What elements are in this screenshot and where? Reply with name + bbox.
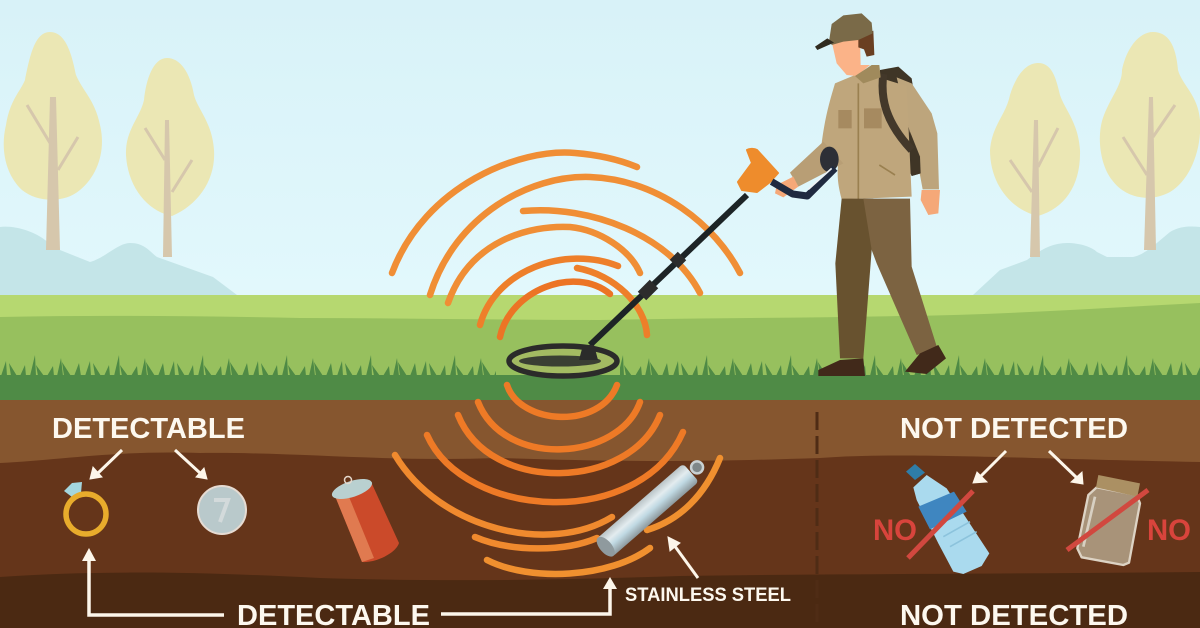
hair	[858, 31, 874, 57]
soil: middle layer	[0, 452, 1200, 628]
cap	[829, 13, 873, 45]
icon: red soda can	[330, 475, 399, 562]
backpack strap	[883, 74, 912, 150]
tree: second left	[126, 58, 214, 257]
signal waves below ground	[395, 385, 720, 574]
collar	[855, 65, 881, 83]
hands	[775, 177, 940, 215]
handle highlight	[808, 168, 832, 189]
tree: second right	[990, 63, 1080, 257]
cuff grip	[820, 147, 839, 172]
person with backpack	[772, 13, 946, 376]
signal waves above ground	[392, 153, 740, 337]
arrows from top NOT DETECTED label	[973, 451, 1083, 484]
left arm	[790, 142, 843, 187]
arrow to stainless steel tube	[668, 537, 698, 578]
search coil	[509, 345, 617, 376]
label: NO right: NO	[1147, 514, 1191, 547]
shaft joints	[642, 256, 682, 296]
tree: far right	[1100, 32, 1200, 250]
backpack pouch	[910, 132, 921, 176]
tree: far left	[4, 32, 102, 250]
neck and face	[832, 38, 870, 76]
arrow: bottom label to ring	[82, 548, 224, 615]
hills: left	[0, 227, 237, 295]
metal detector	[509, 149, 778, 376]
jacket torso	[822, 65, 912, 199]
grass blades	[0, 353, 1200, 376]
divider: dashed vertical line	[816, 412, 818, 628]
backpack	[836, 67, 921, 176]
label: NOT DETECTED top: NOT DETECTED	[900, 413, 1128, 445]
icon: glass jar	[1077, 475, 1140, 565]
right arm	[897, 77, 939, 189]
icon: plastic water bottle	[906, 464, 989, 574]
label: stainless steel: STAINLESS STEEL	[625, 585, 791, 606]
jacket pockets and zip	[838, 108, 882, 128]
control box	[738, 149, 778, 192]
label: NO left: NO	[873, 514, 917, 547]
detector shaft	[590, 195, 747, 345]
icon: stainless steel tube	[593, 454, 709, 560]
sky background	[0, 0, 1200, 296]
hills: right	[973, 227, 1200, 295]
arrows from top DETECTABLE label	[90, 450, 207, 479]
soil: top layer	[0, 400, 1200, 628]
handle	[772, 168, 835, 196]
soil: bottom layer	[0, 572, 1200, 628]
pants	[835, 199, 873, 358]
arrow: bottom label to steel	[441, 577, 617, 614]
icon: gold ring with diamond	[64, 482, 106, 534]
turf band	[0, 375, 1200, 400]
boots	[818, 345, 946, 376]
red slashes	[908, 490, 1148, 558]
cap brim	[815, 38, 834, 50]
grass field	[0, 295, 1200, 380]
label: DETECTABLE top: DETECTABLE	[52, 413, 245, 445]
icon: silver coin	[198, 486, 246, 534]
